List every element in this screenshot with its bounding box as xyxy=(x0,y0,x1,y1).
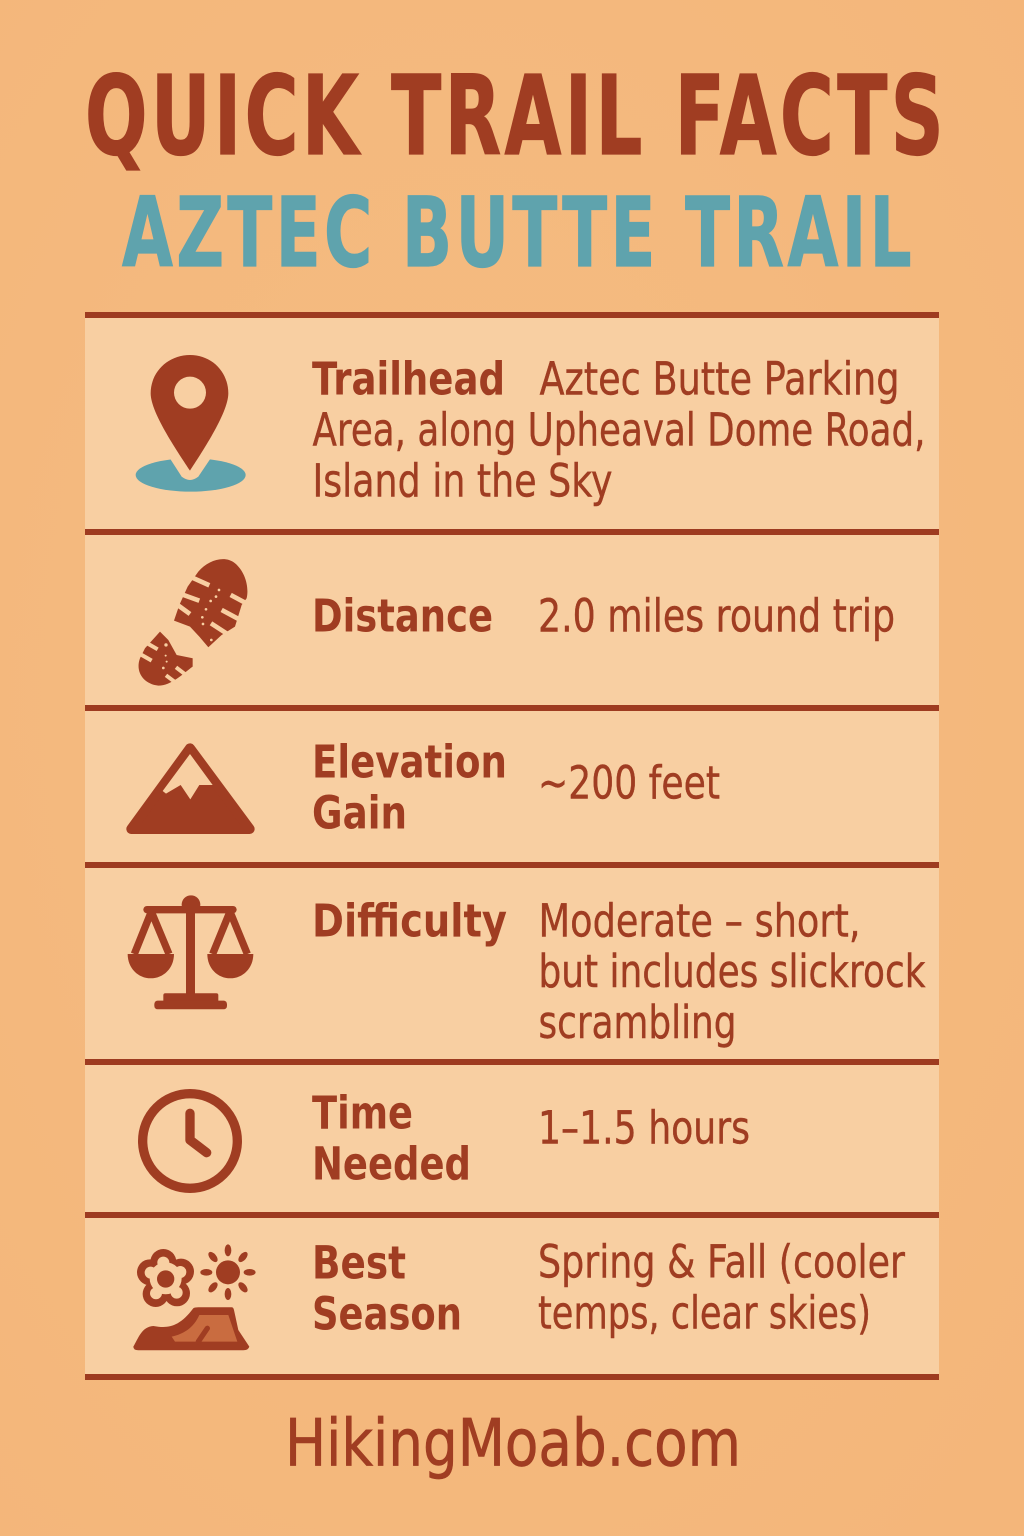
table panel xyxy=(85,315,939,1377)
row: distance xyxy=(312,590,895,642)
row: difficulty: scrambling xyxy=(538,996,736,1049)
row: elevation gain: ~200 feet xyxy=(538,756,720,810)
row: trailhead: Island in the Sky xyxy=(312,454,612,508)
footer: website: HikingMoab.com xyxy=(285,1406,741,1482)
row: best season: temps, clear skies) xyxy=(538,1286,871,1340)
icon: balance scales xyxy=(128,895,253,1009)
row: best season: Spring & Fall (cooler xyxy=(538,1236,905,1288)
row: trailhead xyxy=(312,352,926,508)
row: difficulty xyxy=(312,894,926,1049)
row: distance: 2.0 miles round trip xyxy=(538,590,895,642)
row: difficulty: Moderate – short, xyxy=(538,894,860,948)
row: elevation gain: Elevation xyxy=(312,736,507,788)
row: difficulty: Difficulty xyxy=(312,894,507,948)
row: trailhead: Aztec Butte Parking xyxy=(540,352,900,406)
row: best season xyxy=(312,1236,905,1340)
icon: clock xyxy=(143,1094,237,1188)
row: best season: Season xyxy=(312,1288,462,1340)
row: trailhead: Trailhead xyxy=(312,352,505,406)
row: distance: Distance xyxy=(312,590,493,642)
icon: flower, sun and butte xyxy=(133,1244,256,1350)
row: time needed: 1–1.5 hours xyxy=(538,1102,750,1154)
row: elevation gain xyxy=(312,736,720,840)
row: time needed: Time xyxy=(312,1086,413,1140)
row: elevation gain: Gain xyxy=(312,786,407,840)
row: time needed: Needed xyxy=(312,1138,471,1190)
row: difficulty: but includes slickrock xyxy=(538,945,926,998)
icon: map pin xyxy=(136,355,246,492)
icon: boot prints xyxy=(139,559,249,686)
icon: mountain xyxy=(131,748,250,829)
row: best season: Best xyxy=(312,1236,406,1290)
row: time needed xyxy=(312,1086,750,1190)
